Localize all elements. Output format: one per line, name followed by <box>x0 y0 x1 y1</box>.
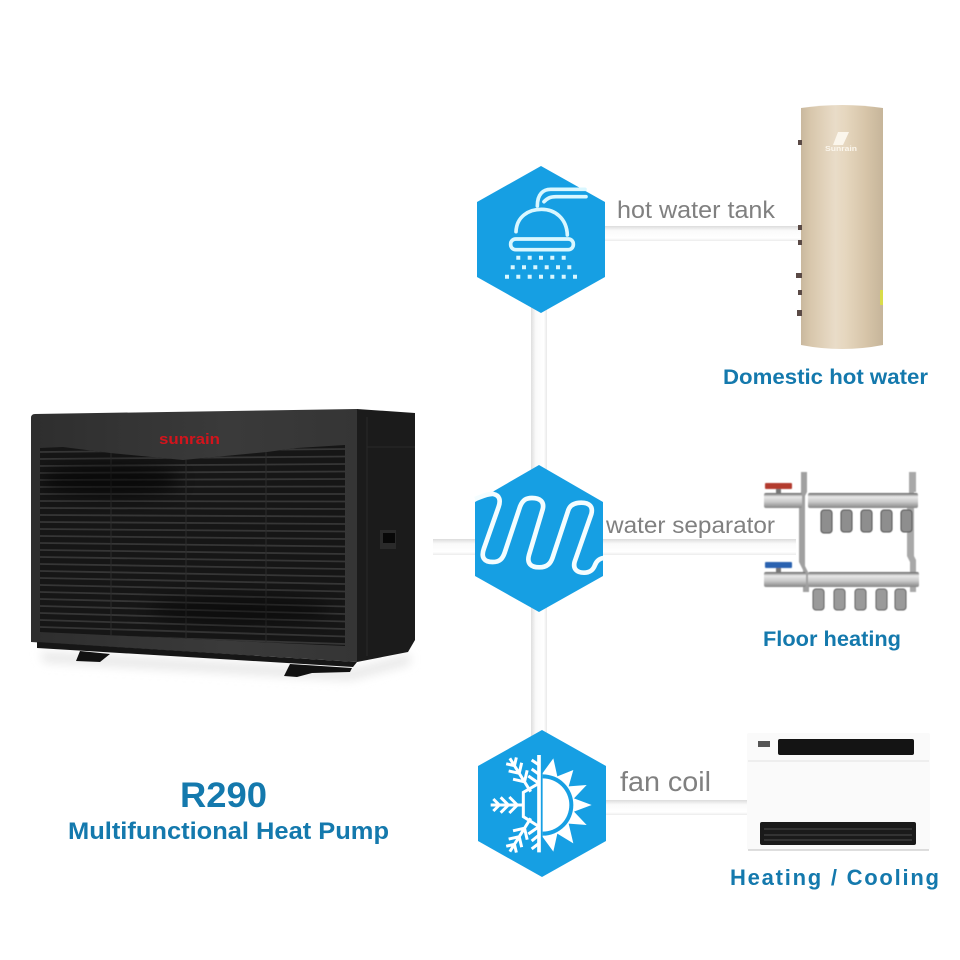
side panel <box>357 409 415 662</box>
serpentine tube <box>475 494 603 573</box>
yellow sticker <box>880 290 883 305</box>
bottom edge <box>748 849 929 851</box>
sun <box>543 758 592 852</box>
water separator manifold product <box>764 472 919 610</box>
fan coil product <box>747 733 930 850</box>
tank logo <box>825 132 857 153</box>
snowflake <box>491 754 539 856</box>
caption: heating / cooling: Heating / Cooling <box>730 865 939 890</box>
shower head <box>511 189 586 250</box>
base strip <box>37 642 357 667</box>
pipe: from heat pump <box>433 539 478 555</box>
blue valve <box>764 562 806 587</box>
tank pipe ports <box>796 140 802 316</box>
hexagon icon: snowflake and sun <box>478 730 606 877</box>
R290: R290 <box>180 776 267 815</box>
display <box>758 741 770 747</box>
water drops <box>505 256 577 279</box>
panel seam <box>748 760 929 762</box>
lower bar <box>808 572 919 587</box>
louvre grille <box>40 440 345 650</box>
pipe: vertical connector <box>531 300 547 740</box>
subtitle: Multifunctional Heat Pump <box>68 818 389 845</box>
pipe: to water separator <box>600 539 796 555</box>
label: hot water tank: hot water tank <box>617 197 776 224</box>
label: fan coil: fan coil <box>620 766 711 797</box>
top air vent <box>778 739 914 755</box>
left foot <box>76 651 110 662</box>
red valve <box>764 483 802 508</box>
right bracket <box>907 472 916 592</box>
side upper panel line <box>367 417 415 656</box>
tank logo: Sunrain <box>825 146 857 153</box>
upper bar <box>808 493 918 508</box>
caption: domestic hot water: Domestic hot water <box>723 366 928 389</box>
fan coil body <box>747 733 930 850</box>
label: water separator: water separator <box>605 512 775 538</box>
bottom air vent <box>760 822 916 845</box>
right foot <box>284 664 352 677</box>
vent louvres <box>764 829 912 840</box>
brand logo: sunrain <box>159 431 220 448</box>
hot water tank product <box>796 105 883 349</box>
pipe: to fan coil <box>602 800 749 815</box>
main title <box>68 776 389 845</box>
left bracket <box>799 472 809 592</box>
heat pump unit <box>31 409 415 680</box>
caption: floor heating: Floor heating <box>763 628 901 651</box>
floor shadow <box>40 652 410 680</box>
upper outlets <box>821 510 912 533</box>
side handle <box>380 530 396 549</box>
hexagon icon: shower <box>477 166 605 313</box>
lower outlets <box>813 589 906 610</box>
pipe: to hot water tank <box>600 226 802 241</box>
front panel <box>31 409 357 662</box>
tank body <box>801 105 883 349</box>
hexagon icon: floor heating coil <box>475 465 603 612</box>
